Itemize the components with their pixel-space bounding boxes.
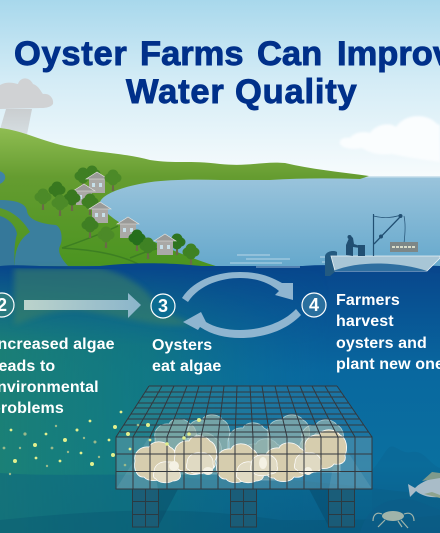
- front row oysters: [135, 430, 347, 483]
- water glints: [230, 255, 332, 267]
- step 3 text: eat algae: [152, 358, 221, 375]
- algae particles: [3, 420, 117, 475]
- lake: [0, 177, 440, 267]
- crab: [373, 511, 414, 528]
- title: Oyster: [14, 35, 128, 73]
- cage legs: [132, 489, 354, 527]
- houses and trees on the hill: [34, 166, 200, 265]
- left rain cloud: [0, 78, 53, 170]
- boat with farmer: [325, 214, 440, 276]
- leg shadows: [158, 489, 329, 527]
- title: Water Quality: [126, 73, 358, 111]
- step 4 text: Farmers: [336, 292, 400, 309]
- step 3 text: Oysters: [152, 337, 212, 354]
- title: Farms: [140, 35, 244, 73]
- cage shading: [116, 386, 372, 489]
- oyster cage: [116, 386, 372, 527]
- step 4 marker: 4: [309, 295, 319, 315]
- back row oysters: [155, 415, 344, 480]
- hill and shoreline: [0, 128, 369, 269]
- step 4 text: harvest: [336, 313, 394, 330]
- step 4 marker: [302, 293, 326, 317]
- title: [14, 35, 440, 111]
- sky: [0, 0, 440, 180]
- step 3 marker: [151, 294, 175, 318]
- step 4 text: oysters and: [336, 335, 427, 352]
- cycle arrows: [182, 272, 301, 338]
- underwater background: [0, 266, 440, 533]
- title: Can: [257, 35, 322, 73]
- step 2: marker, arrow and text: [0, 293, 141, 318]
- algae inside cage: [120, 411, 201, 466]
- surface waves: [0, 263, 440, 273]
- arrow: 2 to 3: [24, 293, 141, 318]
- step 3 marker: 3: [158, 296, 168, 316]
- fish: [408, 472, 440, 498]
- reef silhouettes: [360, 446, 440, 533]
- right cloud: [340, 116, 440, 162]
- cage grid: [116, 386, 372, 489]
- river: [0, 171, 70, 268]
- peninsula paths: [62, 226, 160, 268]
